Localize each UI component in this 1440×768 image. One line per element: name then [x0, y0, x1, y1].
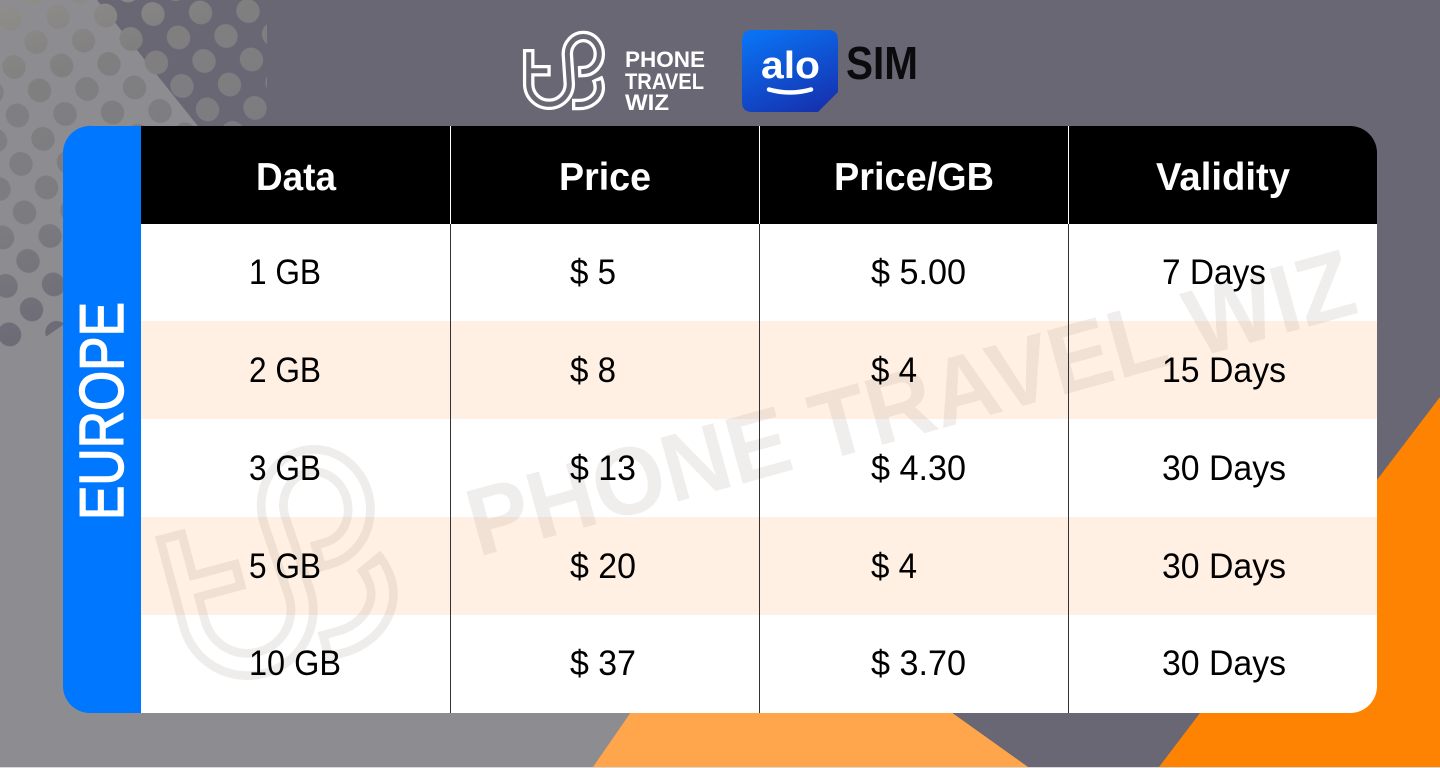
data column: [249, 253, 341, 683]
logo wordmark: PHONE: [625, 47, 705, 72]
validity column: [1162, 253, 1286, 683]
header row: [256, 156, 1290, 199]
header row: Data: [256, 156, 336, 199]
alo badge: [742, 30, 838, 112]
price column: $ 13: [570, 449, 636, 488]
background: grey diagonal panel: [0, 0, 640, 768]
data column: 2 GB: [249, 351, 321, 390]
table rows: [63, 126, 1377, 713]
validity column: 7 Days: [1162, 253, 1266, 292]
alo wordmark: alo: [761, 45, 820, 87]
header row: Price: [559, 156, 651, 199]
data column: 5 GB: [249, 547, 321, 586]
price per GB column: $ 4: [871, 351, 917, 390]
SIM label: SIM: [846, 37, 918, 89]
region label: EUROPE: [68, 302, 137, 520]
price per GB column: $ 4: [871, 547, 917, 586]
background: light orange trapezoid: [593, 712, 1028, 767]
logo: alo SIM: [742, 30, 918, 112]
price per GB column: [871, 253, 966, 683]
header row: Validity: [1156, 156, 1290, 199]
price column: $ 37: [570, 644, 636, 683]
logo mark: [529, 36, 599, 105]
logo wordmark: TRAVEL: [625, 69, 704, 94]
column dividers: [450, 126, 1069, 713]
background: dot pattern: [0, 0, 267, 346]
data column: 1 GB: [249, 253, 321, 292]
background: orange triangle: [1159, 397, 1440, 767]
price column: $ 5: [570, 253, 616, 292]
price per GB column: $ 3.70: [871, 644, 966, 683]
bottom edge line: [0, 767, 1440, 768]
watermark: logo: [155, 445, 398, 680]
logo wordmark: [625, 47, 705, 115]
data column: 3 GB: [249, 449, 321, 488]
table panel: [63, 126, 1377, 720]
validity column: 15 Days: [1162, 351, 1286, 390]
validity column: 30 Days: [1162, 547, 1286, 586]
price column: $ 8: [570, 351, 616, 390]
data column: 10 GB: [249, 644, 341, 683]
price column: $ 20: [570, 547, 636, 586]
validity column: 30 Days: [1162, 449, 1286, 488]
price per GB column: $ 5.00: [871, 253, 966, 292]
price column: [570, 253, 636, 683]
header row: Price/GB: [834, 156, 994, 199]
logo wordmark: WIZ: [625, 90, 669, 115]
watermark: text: PHONE TRAVEL WIZ: [455, 229, 1366, 577]
logo: Phone Travel Wiz: [529, 36, 705, 115]
validity column: 30 Days: [1162, 644, 1286, 683]
price per GB column: $ 4.30: [871, 449, 966, 488]
alo smile: [769, 90, 811, 92]
